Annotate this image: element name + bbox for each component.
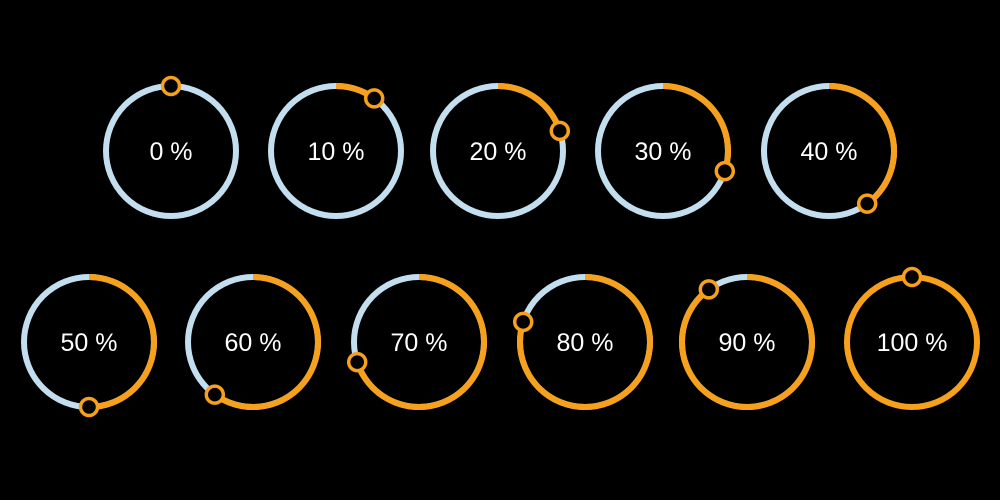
ring: 100% [847, 268, 977, 407]
ring: 50% [24, 277, 154, 416]
ring: 0% [106, 78, 236, 216]
ring: 10% [271, 86, 401, 216]
ring: 60% [188, 277, 318, 407]
ring: 70%: 70 % [391, 329, 447, 357]
ring: 40% [764, 86, 894, 216]
ring: 30% [598, 86, 733, 216]
ring: 60%: 60 % [225, 329, 281, 357]
ring: 20%: 20 % [470, 138, 526, 166]
ring: 30%: 30 % [635, 138, 691, 166]
ring: 80%: 80 % [557, 329, 613, 357]
ring: 80% [515, 277, 650, 407]
ring: 70% [349, 277, 484, 407]
ring: 90%: 90 % [719, 329, 775, 357]
ring: 90% [682, 277, 812, 407]
ring: 50%: 50 % [61, 329, 117, 357]
ring: 40%: 40 % [801, 138, 857, 166]
ring: 100%: 100 % [877, 329, 947, 357]
ring: 0%: 0 % [149, 138, 193, 166]
ring: 10%: 10 % [308, 138, 364, 166]
ring: 20% [433, 86, 568, 216]
